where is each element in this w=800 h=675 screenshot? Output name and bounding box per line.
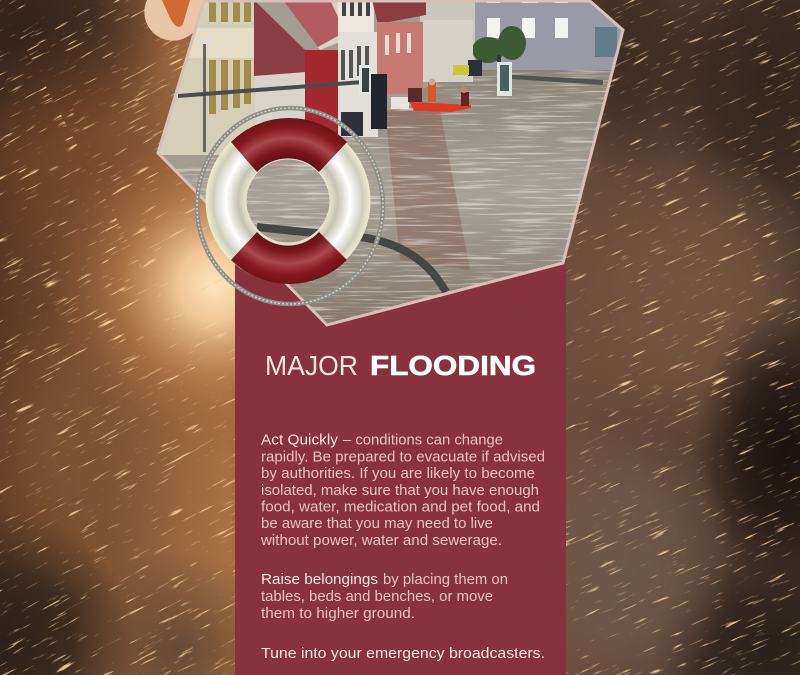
text block: raise belongings: them to higher ground. <box>261 605 415 622</box>
text block: act quickly: rapidly. Be prepared to evacuate if advised <box>261 448 545 466</box>
photo: flooded street <box>158 0 623 325</box>
water surface <box>158 70 623 325</box>
title: MAJOR <box>265 350 358 381</box>
red-roof houses <box>254 0 473 140</box>
text block: act quickly: isolated, make sure that you have enough <box>261 482 539 499</box>
icon: orange glowing bubble <box>144 0 204 41</box>
title <box>265 350 536 381</box>
title: FLOODING <box>370 350 536 381</box>
photo frame <box>158 1 623 325</box>
text block: act quickly: without power, water and sewerage. <box>260 532 502 549</box>
rescue boat with crew <box>408 78 471 112</box>
text block: raise belongings <box>261 571 508 622</box>
text block: raise belongings: by placing them on <box>383 571 508 588</box>
icon: lifebuoy <box>226 118 350 284</box>
text block: raise belongings: Raise belongings <box>261 571 378 588</box>
beige building <box>158 0 255 155</box>
text block: tune in: Tune into your emergency broadcasters. <box>261 645 545 662</box>
grey building in distance <box>420 2 622 70</box>
icon: rope around lifebuoy <box>197 108 383 304</box>
text block: act quickly <box>260 432 545 549</box>
black hose across water <box>257 227 446 292</box>
traffic poles and signals <box>178 60 603 129</box>
text block: raise belongings: tables, beds and benches, or move <box>261 588 493 605</box>
panel: red content panel <box>235 255 566 675</box>
tree <box>473 26 526 63</box>
text block: act quickly: by authorities. If you are likely to become <box>261 465 535 482</box>
text block: act quickly: – conditions can change <box>343 432 503 448</box>
text block: act quickly: food, water, medication and pet food, and <box>261 498 540 516</box>
text block: act quickly: Act Quickly <box>261 432 339 448</box>
text block: act quickly: be aware that you may need to live <box>261 515 493 532</box>
